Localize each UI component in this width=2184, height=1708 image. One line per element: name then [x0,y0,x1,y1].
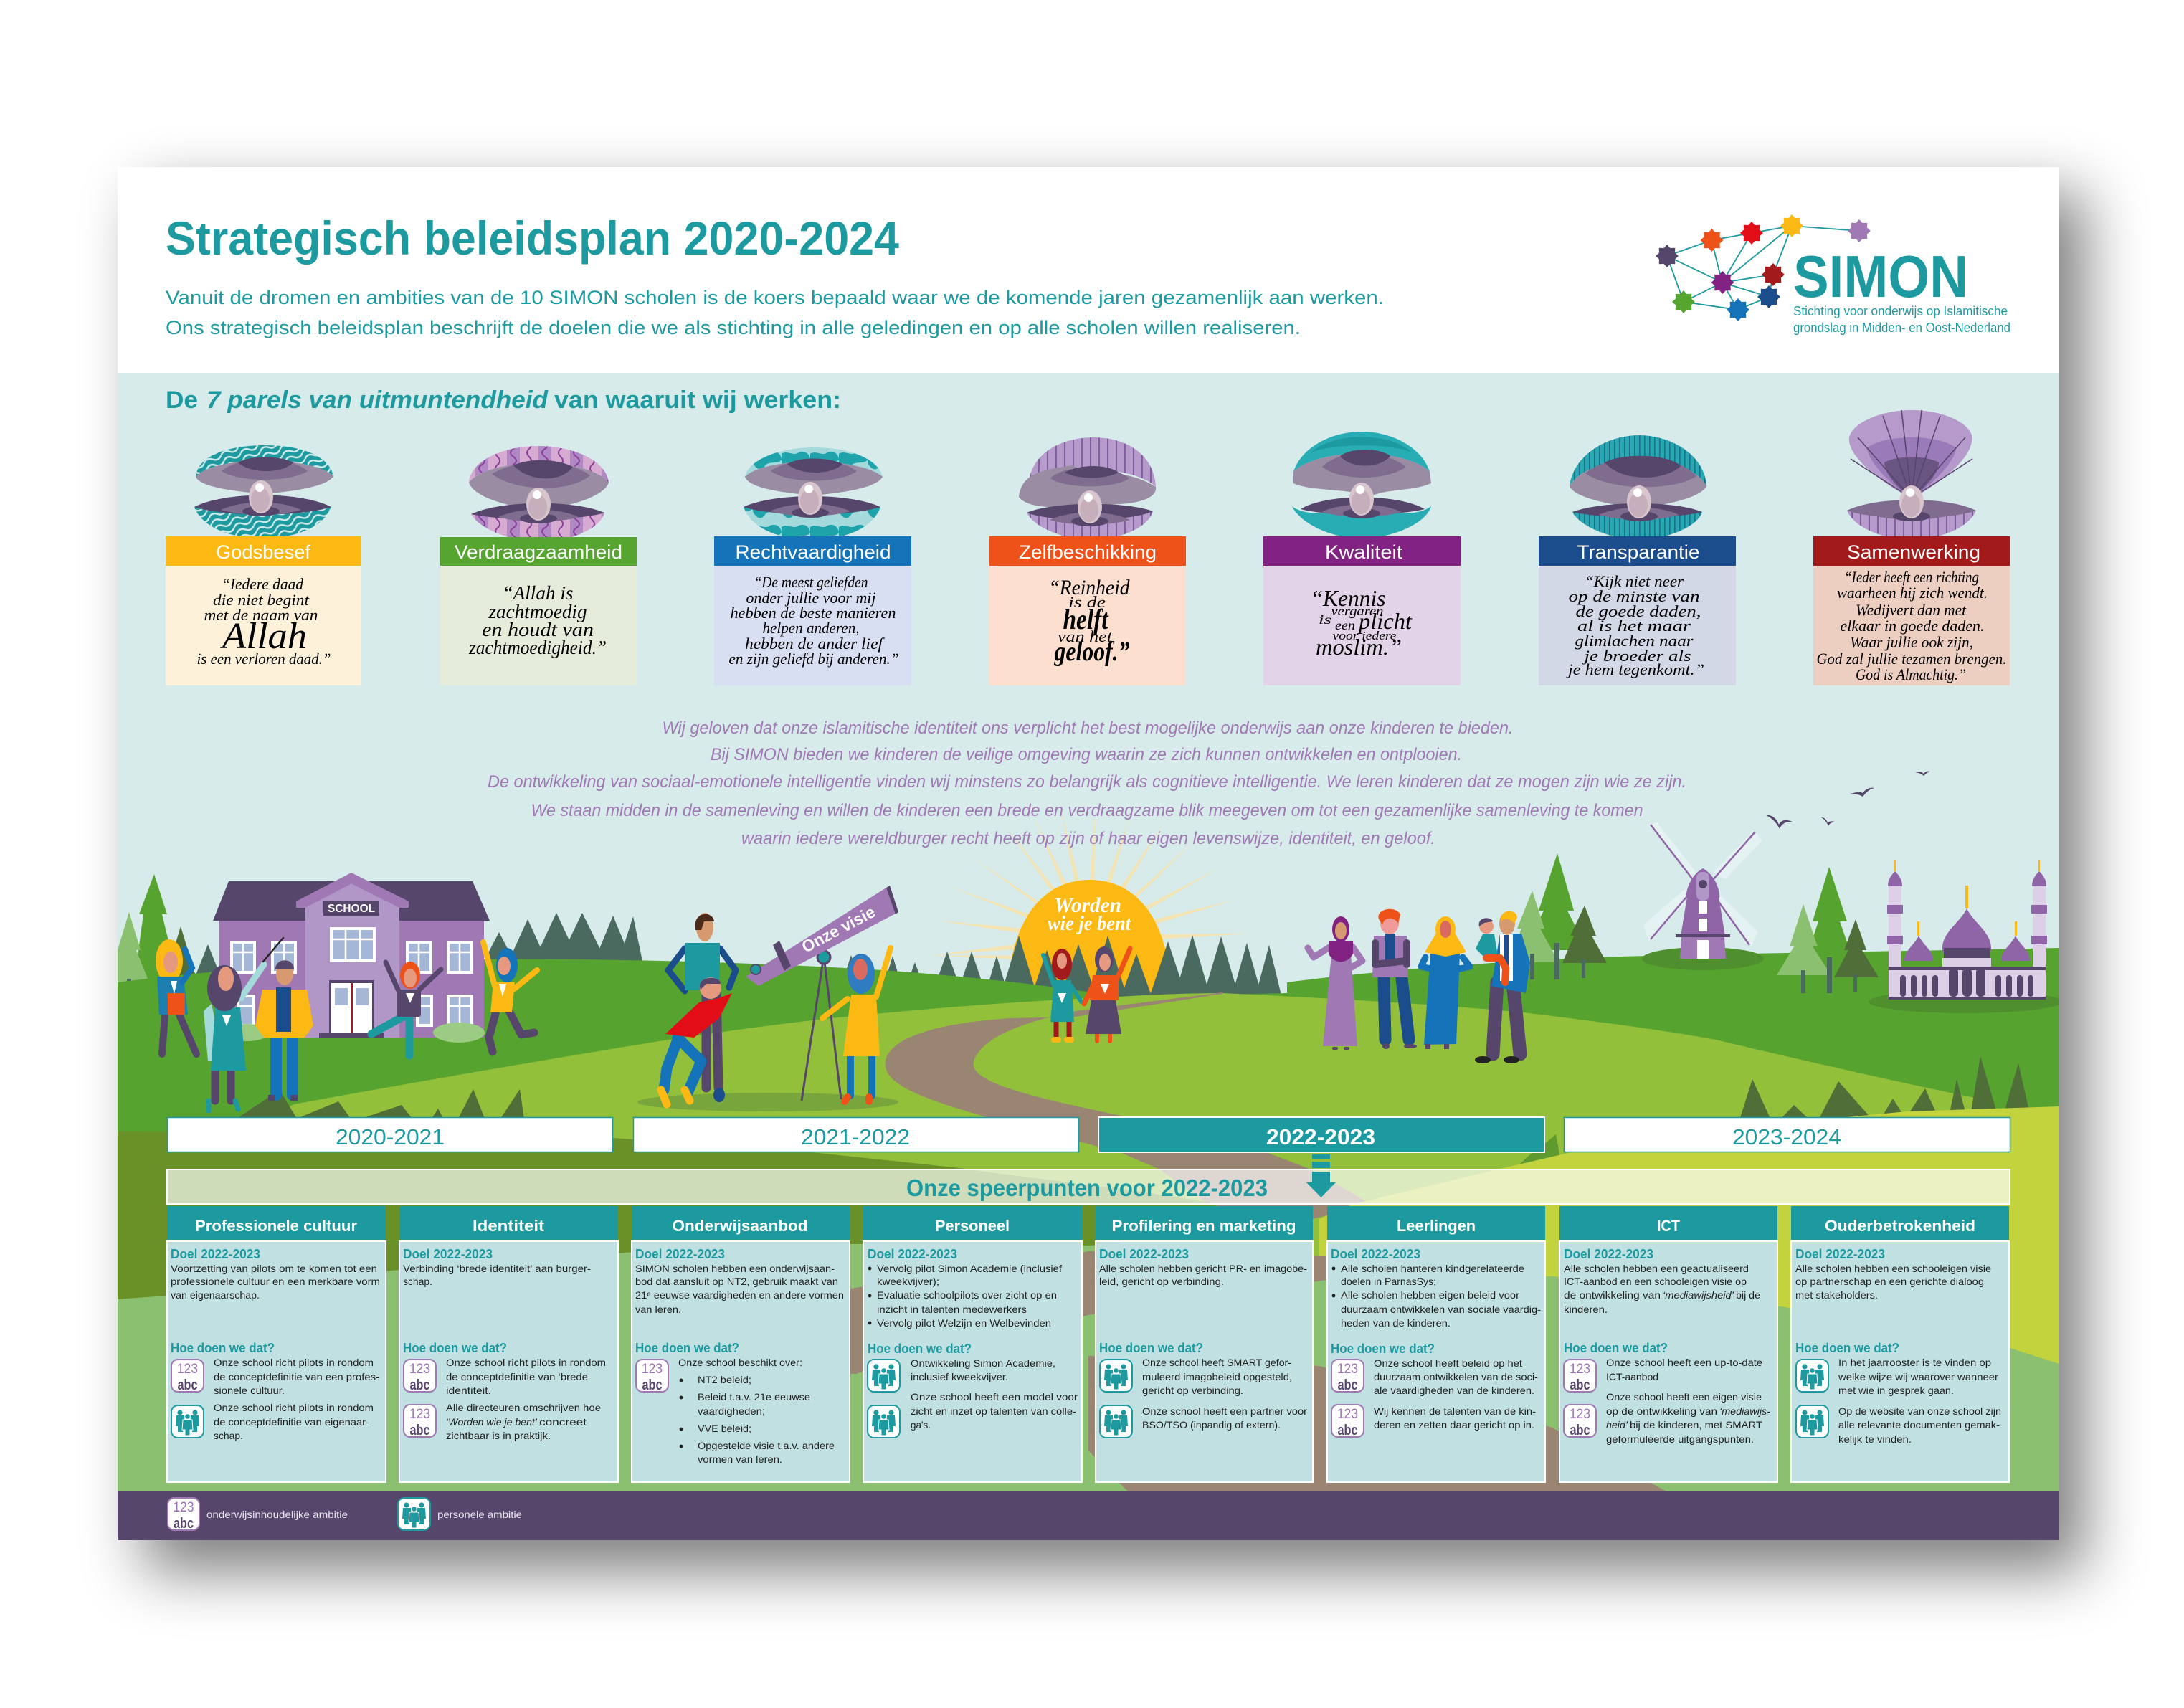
pearl card: Samenwerking [1813,536,2010,685]
card: Leerlingen: doelen in ParnasSys; [1341,1276,1436,1287]
icon: 123 abc: abc [1570,1423,1590,1438]
vision text [488,718,1686,848]
icon: people [1796,1360,1828,1392]
legend [168,1498,522,1532]
children [1043,946,1130,1041]
card: Ouderbetrokenheid: Alle scholen hebben een schooleigen visie [1795,1263,1991,1274]
card: Professionele cultuur: de conceptdefinitie van eigenaar- [214,1416,369,1428]
card: Personeel: kweekvijver); [877,1276,939,1287]
icon: 123 abc: abc [410,1423,430,1438]
pearl card: Transparantie: je hem tegenkomt.” [1566,660,1704,678]
pearl card: Rechtvaardigheid: hebben de beste manieren [730,604,896,622]
card: Leerlingen: Alle scholen hebben eigen beleid voor [1341,1289,1519,1301]
card: ICT: Onze school heeft een eigen visie [1606,1391,1762,1403]
lime hill [1319,1106,2059,1364]
person: jumping girl in yellow [483,942,537,1052]
speerpunten banner: Onze speerpunten voor 2022-2023 [906,1175,1268,1201]
icon: 123 abc legend: abc [174,1516,194,1532]
icon: 123 abc [404,1360,436,1393]
foreground tree silhouettes [237,1056,2031,1120]
pearl card: Transparantie [1539,536,1736,685]
heading: 7 parels [166,386,841,414]
dark green hill [118,948,2059,1131]
icon: 123 abc: 123 [409,1362,430,1377]
icon: 123 abc: 123 [1337,1407,1358,1422]
shell: Transparantie [1570,435,1706,540]
SIMON logo: grondslag in Midden- en Oost-Nederland [1793,321,2010,335]
shell: Samenwerking [1847,410,1976,540]
card: Personeel: Hoe doen we dat? [868,1342,972,1356]
poster drop shadow [143,192,2085,1572]
header background [118,167,2059,373]
card: Identiteit: de conceptdefinitie van ‘brede [446,1371,588,1382]
pearl card: Rechtvaardigheid: hebben de ander lief [745,635,885,653]
card: Profilering en marketing: leid, gericht op verbinding. [1099,1276,1224,1287]
pearl card: Kwaliteit: “Kennis [1311,585,1385,611]
pearl card: Samenwerking: “Ieder heeft een richting [1844,568,1979,586]
card: Personeel: inclusief kweekvijver. [911,1371,1008,1382]
pearl card: Zelfbeschikking: van het [1058,627,1113,645]
card: Leerlingen: deren en zetten daar gericht op in. [1374,1419,1534,1431]
pearl card: Zelfbeschikking: helft [1063,603,1109,635]
pearl card: Samenwerking: God zal jullie tezamen brengen. [1817,650,2006,668]
card: Leerlingen: heden van de kinderen. [1341,1317,1451,1329]
sun rays [928,810,1248,962]
sun slogan [1048,893,1131,935]
card: Ouderbetrokenheid: alle relevante documenten gemak- [1838,1419,2000,1431]
year: 2021-2022 [634,1117,1078,1152]
card: ICT: Alle scholen hebben een geactualiseerd [1564,1263,1749,1274]
card: Professionele cultuur: professionele cultuur en een merkbare vorm [171,1276,380,1287]
icon: 123 abc: 123 [1337,1362,1358,1377]
soft green foreground [118,1240,2059,1491]
card: ICT: ICT [1657,1217,1680,1235]
pearl card: Transparantie: al is het maar [1577,617,1691,635]
card: Onderwijsaanbod: van leren. [635,1304,681,1315]
card: Onderwijsaanbod: VVE beleid; [698,1423,751,1434]
SIMON logo: SIMON [1793,243,1968,310]
card: Personeel: ga's. [911,1419,931,1431]
year: 2021-2022: 2021-2022 [801,1124,910,1149]
card: Professionele cultuur: de conceptdefinitie van een profes- [214,1371,379,1382]
card: Professionele cultuur: schap. [214,1430,243,1441]
card: Leerlingen: Alle scholen hanteren kindgerelateerde [1341,1263,1524,1274]
card: Profilering en marketing: Hoe doen we dat? [1099,1341,1203,1355]
speerpunten banner [167,1169,2010,1204]
icon: people [1100,1405,1132,1438]
card: Personeel: Vervolg pilot Welzijn en Welbevinden [877,1317,1051,1329]
card: Professionele cultuur: sionele cultuur. [214,1385,285,1396]
pearl card: Kwaliteit: Kwaliteit [1325,541,1403,563]
card: Profilering en marketing: Onze school heeft SMART gefor- [1142,1357,1291,1368]
year: 2020-2021 [168,1117,612,1152]
card: Onderwijsaanbod: NT2 beleid; [698,1374,751,1385]
icon: 123 abc [404,1405,436,1438]
year: 2022-2023 (active): 2022-2023 [1266,1124,1375,1149]
card: ICT: op de ontwikkeling van [1606,1405,1717,1417]
card: ICT: bij de kinderen, met SMART [1630,1419,1762,1431]
card: Professionele cultuur: van eigenaarschap. [171,1289,260,1301]
icon: people [171,1405,204,1438]
person: woman in blue dress [1421,916,1470,1049]
pearl card: Transparantie: op de minste van [1569,587,1699,605]
telescope with tripod [637,886,898,1111]
card: Leerlingen: Hoe doen we dat? [1331,1342,1435,1356]
pearl card: Godsbesef: is een verloren daad.” [196,650,331,668]
sun slogan: Worden [1054,893,1121,917]
shell: Verdraagzaamheid [469,446,609,542]
card: ICT [1559,1206,1777,1482]
card: ICT: bij de [1736,1289,1760,1301]
icon: 123 abc [1331,1360,1364,1393]
card: ICT: ICT-aanbod en een schooleigen visie op [1564,1276,1747,1287]
vision text: De ontwikkeling van sociaal-emotionele intelligentie vinden wij minstens zo belangrijk als cognitieve intelligentie. We leren kinderen dat ze mogen zijn wie ze zijn. [488,772,1686,792]
vision text: Wij geloven dat onze islamitische identiteit ons verplicht het best mogelijke onderwijs aan onze kinderen te bieden. [663,718,1513,738]
card: ICT: Onze school heeft een up-to-date [1606,1357,1762,1368]
year: 2023-2024: 2023-2024 [1732,1124,1841,1149]
card: Profilering en marketing: gericht op verbinding. [1142,1385,1243,1396]
icon: 123 abc: 123 [409,1407,430,1422]
pearl card: Samenwerking: God is Almachtig.” [1856,665,1966,683]
person: man in teal vest [668,913,736,1102]
pearl card: Verdraagzaamheid: zachtmoedig [488,601,587,622]
pearl card: Kwaliteit: een [1335,618,1355,632]
icon: 123 abc: abc [178,1377,198,1393]
sky background [118,373,2059,994]
card: Personeel: Ontwikkeling Simon Academie, [911,1357,1055,1369]
card: Identiteit: identiteit. [446,1385,491,1396]
card: Identiteit: schap. [403,1276,432,1287]
card: Professionele cultuur: Voortzetting van pilots om te komen tot een [171,1263,377,1274]
year: 2022-2023 (active) [1098,1117,1544,1152]
card: Leerlingen [1327,1206,1545,1482]
shell: Zelfbeschikking [1019,437,1156,540]
shell: Godsbesef [194,445,333,539]
background trees left [118,874,195,982]
bottom legend strip background [118,1491,2059,1540]
sun slogan: wie je bent [1048,913,1131,935]
icon: 123 abc: 123 [1570,1362,1590,1377]
card: Leerlingen: Wij kennen de talenten van de kin- [1374,1405,1536,1417]
card: Professionele cultuur [167,1206,386,1482]
pearl card: Samenwerking: elkaar in goede daden. [1840,617,1985,635]
person: man in yellow jacket [255,960,313,1101]
card: Leerlingen: duurzaam ontwikkelen van sociale vaardig- [1341,1304,1541,1315]
card: Onderwijsaanbod: Onderwijsaanbod [673,1217,807,1235]
card: Identiteit: ‘Worden wie je bent’ [446,1416,538,1428]
shell: Rechtvaardigheid [744,447,883,540]
arrow [1306,1154,1336,1197]
SIMON logo [1656,214,2010,335]
card: Professionele cultuur: Professionele cultuur [195,1217,357,1235]
card: Leerlingen: duurzaam ontwikkelen van de soci- [1374,1371,1538,1382]
pearl card: Kwaliteit: moslim.” [1316,634,1402,660]
pearl card: Rechtvaardigheid: “De meest geliefden [754,573,868,591]
intro text: Ons strategisch beleidsplan beschrijft de doelen die we als stichting in alle geledingen en op alle scholen willen realiseren. [166,317,1301,338]
pearl card: Samenwerking: waarheen hij zich wendt. [1837,584,1988,602]
pearl card: Godsbesef: Allah [220,616,307,657]
pearl card: Transparantie: glimlachen naar [1575,632,1694,650]
heading: 7 parels: 7 parels van uitmuntendheid [206,386,549,414]
card: Profilering en marketing: Doel 2022-2023 [1099,1247,1189,1261]
light green hill [118,993,2059,1364]
card: Onderwijsaanbod: bod dat aansluit op NT2, gebruik maakt van [635,1276,838,1287]
pearl card: Zelfbeschikking: Zelfbeschikking [1019,541,1157,563]
card: Onderwijsaanbod: Hoe doen we dat? [635,1341,739,1355]
card: Leerlingen: ale vaardigheden van de kinderen. [1374,1385,1534,1396]
pearl card: Godsbesef: Godsbesef [216,541,310,563]
card: Ouderbetrokenheid: welke wijze wij waarover wanneer [1838,1371,1998,1382]
card: Personeel: inzicht in talenten medewerkers [877,1304,1027,1315]
school building [213,873,490,1043]
pearl card: Verdraagzaamheid: zachtmoedigheid.” [468,637,607,658]
card: Onderwijsaanbod: Beleid t.a.v. 21e eeuwse [698,1391,810,1403]
card: Leerlingen: Onze school heeft beleid op het [1374,1357,1522,1369]
card: Ouderbetrokenheid [1791,1206,2009,1482]
legend: onderwijsinhoudelijke ambitie [206,1509,348,1520]
person: father with child [1475,911,1530,1063]
winding road [886,992,1372,1219]
card: Onderwijsaanbod: vaardigheden; [698,1405,765,1417]
card: Personeel: Personeel [935,1217,1010,1235]
olive hill [118,1131,1219,1299]
card: Onderwijsaanbod: Opgestelde visie t.a.v. andere [698,1440,835,1451]
icon: 123 abc: abc [1570,1377,1590,1393]
card: Onderwijsaanbod [632,1206,850,1482]
intro text [166,287,1384,338]
icon: people [1796,1405,1828,1438]
person: man with orange hair [1372,909,1417,1049]
person: woman in yellow [822,948,891,1101]
icon: 123 abc: abc [410,1377,430,1393]
icon: 123 abc: 123 [642,1362,663,1377]
icon: people [868,1360,900,1392]
card: Onderwijsaanbod: Doel 2022-2023 [635,1247,725,1261]
windmill [1642,822,1764,970]
card: Professionele cultuur: Onze school richt pilots in rondom [214,1357,374,1368]
card: Ouderbetrokenheid: op partnerschap en een gerichte dialoog [1795,1276,1984,1287]
card: Profilering en marketing: BSO/TSO (inpandig of extern). [1142,1419,1281,1431]
card: ICT: de ontwikkeling van [1564,1289,1661,1301]
vision text: waarin iedere wereldburger recht heeft op zijn of haar eigen levenswijze, identiteit, en geloof. [741,829,1435,848]
pearl card: Samenwerking: Waar jullie ook zijn, [1850,633,1973,651]
icon: 123 abc: 123 [177,1362,198,1377]
pearl card: Zelfbeschikking: geloof.” [1054,637,1130,667]
icon: people [1100,1360,1132,1392]
pearl card: Kwaliteit: voor iedere [1332,629,1397,642]
pearl card: Rechtvaardigheid: onder jullie voor mij [746,589,876,607]
shell: Kwaliteit [1292,432,1431,539]
road ribbons behind cards [846,1251,1326,1374]
background trees right [1508,853,1879,993]
pearl card: Verdraagzaamheid: “Allah is [502,582,574,604]
card: Ouderbetrokenheid: met stakeholders. [1795,1289,1878,1301]
card: Profilering en marketing [1096,1206,1313,1482]
pearl card: Rechtvaardigheid: en zijn geliefd bij anderen.” [728,650,899,668]
pearl card: Kwaliteit [1263,536,1461,685]
card: ICT: kinderen. [1564,1304,1608,1315]
icon: 123 abc: 123 [1570,1407,1590,1422]
pearl card: Rechtvaardigheid: helpen anderen, [763,619,859,637]
card: ICT: ‘mediawijsheid’ [1663,1289,1734,1301]
icon: 123 abc [1331,1405,1364,1438]
pearl card: Godsbesef: die niet begint [213,591,310,609]
pearl card: Transparantie: Transparantie [1577,541,1699,563]
card: Profilering en marketing: Onze school heeft een partner voor [1142,1405,1307,1417]
card: Identiteit: Onze school richt pilots in rondom [446,1357,606,1368]
card: Ouderbetrokenheid: Ouderbetrokenheid [1825,1217,1975,1235]
card: Onderwijsaanbod: Onze school beschikt over: [678,1357,802,1368]
card: Ouderbetrokenheid: met wie in gesprek gaan. [1838,1385,1954,1396]
card: Profilering en marketing: Alle scholen hebben gericht PR- en imagobe- [1099,1263,1307,1274]
pearl card: Transparantie: de goede daden, [1576,602,1701,620]
icon: 123 abc [1564,1405,1596,1438]
SIMON logo: Stichting voor onderwijs op Islamitische [1793,304,2008,318]
pearl card: Samenwerking: Wedijvert dan met [1856,601,1967,619]
mosque [1869,860,2062,1013]
card: Personeel: Doel 2022-2023 [868,1247,957,1261]
card: Leerlingen: Doel 2022-2023 [1331,1247,1420,1261]
pearl card: Rechtvaardigheid: Rechtvaardigheid [736,541,891,563]
person: woman with book [156,939,196,1054]
pearl card: Godsbesef: met de naam van [204,606,318,624]
title: Strategisch beleidsplan 2020-2024 [166,212,899,265]
card: Profilering en marketing: muleerd imagobeleid opgesteld, [1142,1371,1292,1382]
icon: 123 abc legend: 123 [174,1500,194,1515]
card: ICT: geformuleerde uitgangspunten. [1606,1433,1754,1445]
card: Onderwijsaanbod: SIMON scholen hebben een onderwijsaan- [635,1263,835,1274]
card: Ouderbetrokenheid: Hoe doen we dat? [1795,1341,1899,1355]
pearl card: Verdraagzaamheid: en houdt van [482,619,594,640]
pearl card: Kwaliteit: is [1319,612,1331,627]
card: Profilering en marketing: Profilering en marketing [1111,1217,1296,1235]
card: Professionele cultuur: Onze school richt pilots in rondom [214,1402,374,1413]
card: Identiteit: Doel 2022-2023 [403,1247,493,1261]
icon: 123 abc: abc [1338,1377,1358,1393]
card: ICT: Hoe doen we dat? [1564,1341,1668,1355]
pearl card: Verdraagzaamheid [440,537,637,685]
card: Onderwijsaanbod: vormen van leren. [698,1453,782,1465]
card: Ouderbetrokenheid: In het jaarrooster is te vinden op [1838,1357,1991,1368]
school building: SCHOOL [328,903,375,915]
icon: 123 abc [636,1360,668,1393]
year: 2023-2024 [1565,1117,2010,1152]
icon: people [868,1405,900,1438]
pearl card: Godsbesef [166,536,361,685]
person: boy looking through telescope [661,977,732,1104]
pearl card: Godsbesef: “Iedere daad [222,575,304,593]
card: Ouderbetrokenheid: Doel 2022-2023 [1795,1247,1885,1261]
pearl card: Samenwerking: Samenwerking [1847,541,1980,563]
icon: 123 abc [1564,1360,1596,1393]
icon: 123 abc: abc [642,1377,663,1393]
pearl card: Zelfbeschikking: is de [1068,593,1106,611]
small trees at lime hill [1519,1134,1562,1165]
card: Onderwijsaanbod: 21ᵉ eeuwse vaardigheden en andere vormen [635,1289,844,1301]
heading: 7 parels: De [166,386,198,414]
telescope with tripod: Onze visie [799,902,878,957]
card: Identiteit: Hoe doen we dat? [403,1341,507,1355]
card: ICT: ‘mediawijs- [1719,1405,1770,1417]
card: Personeel: Evaluatie schoolpilots over zicht op en [877,1289,1057,1301]
card: Ouderbetrokenheid: Op de website van onze school zijn [1838,1405,2001,1417]
person: woman in lilac dress [1308,916,1362,1048]
card: Identiteit: zichtbaar is in praktijk. [446,1430,551,1441]
card: Personeel: Vervolg pilot Simon Academie (inclusief [877,1263,1062,1274]
pearl card: Verdraagzaamheid: Verdraagzaamheid [455,541,622,563]
pearl card: Zelfbeschikking: “Reinheid [1048,576,1130,599]
card: ICT: heid’ [1606,1419,1628,1431]
poster panel [118,167,2062,1540]
sun [1011,880,1166,994]
icon: people legend [398,1498,430,1530]
card: ICT: ICT-aanbod [1606,1371,1658,1382]
intro text: Vanuit de dromen en ambities van de 10 SIMON scholen is de koers bepaald waar we de komende jaren gezamenlijk aan werken. [166,287,1384,308]
pearl card: Transparantie: “Kijk niet neer [1585,572,1684,590]
card: Ouderbetrokenheid: kelijk te vinden. [1838,1433,1912,1445]
card: Leerlingen: Leerlingen [1397,1217,1476,1235]
card: Identiteit [399,1206,618,1482]
pearl card: Kwaliteit: vergaren [1331,604,1384,618]
person: teacher in hijab [204,938,283,1111]
distant slate trees [190,913,1283,1004]
card: Identiteit: concreet [539,1416,587,1428]
heading: 7 parels: van waaruit wij werken: [554,386,841,414]
birds [1766,772,1930,829]
year: 2020-2021: 2020-2021 [336,1124,445,1149]
vision text: We staan midden in de samenleving en willen de kinderen een brede en verdraagzame blik meegeven om tot een gezamenlijke samenleving te komen [531,801,1643,820]
icon: 123 abc: abc [1338,1423,1358,1438]
vision text: Bij SIMON bieden we kinderen de veilige omgeving waarin ze zich kunnen ontwikkelen en ontplooien. [711,745,1462,764]
card: Identiteit: Identiteit [473,1217,545,1235]
pearl card: Rechtvaardigheid [714,536,911,685]
pearl card: Transparantie: je broeder als [1582,647,1691,665]
card: Identiteit: Alle directeuren omschrijven hoe [446,1402,601,1413]
card: Personeel: Onze school heeft een model voor [911,1391,1078,1403]
icon: 123 abc [171,1360,204,1393]
card: Professionele cultuur: Hoe doen we dat? [171,1341,275,1355]
card: Personeel: zicht en inzet op talenten van colle- [911,1405,1076,1417]
card: Professionele cultuur: Doel 2022-2023 [171,1247,260,1261]
legend: personele ambitie [437,1509,522,1520]
icon: 123 abc legend [168,1498,199,1532]
card: ICT: Doel 2022-2023 [1564,1247,1653,1261]
card: Personeel [863,1206,1082,1482]
person: girl with red hair [371,962,441,1055]
pearl card: Kwaliteit: plicht [1357,608,1413,634]
pearl card: Zelfbeschikking [989,536,1186,685]
card: Identiteit: Verbinding ‘brede identiteit’ aan burger- [403,1263,591,1274]
